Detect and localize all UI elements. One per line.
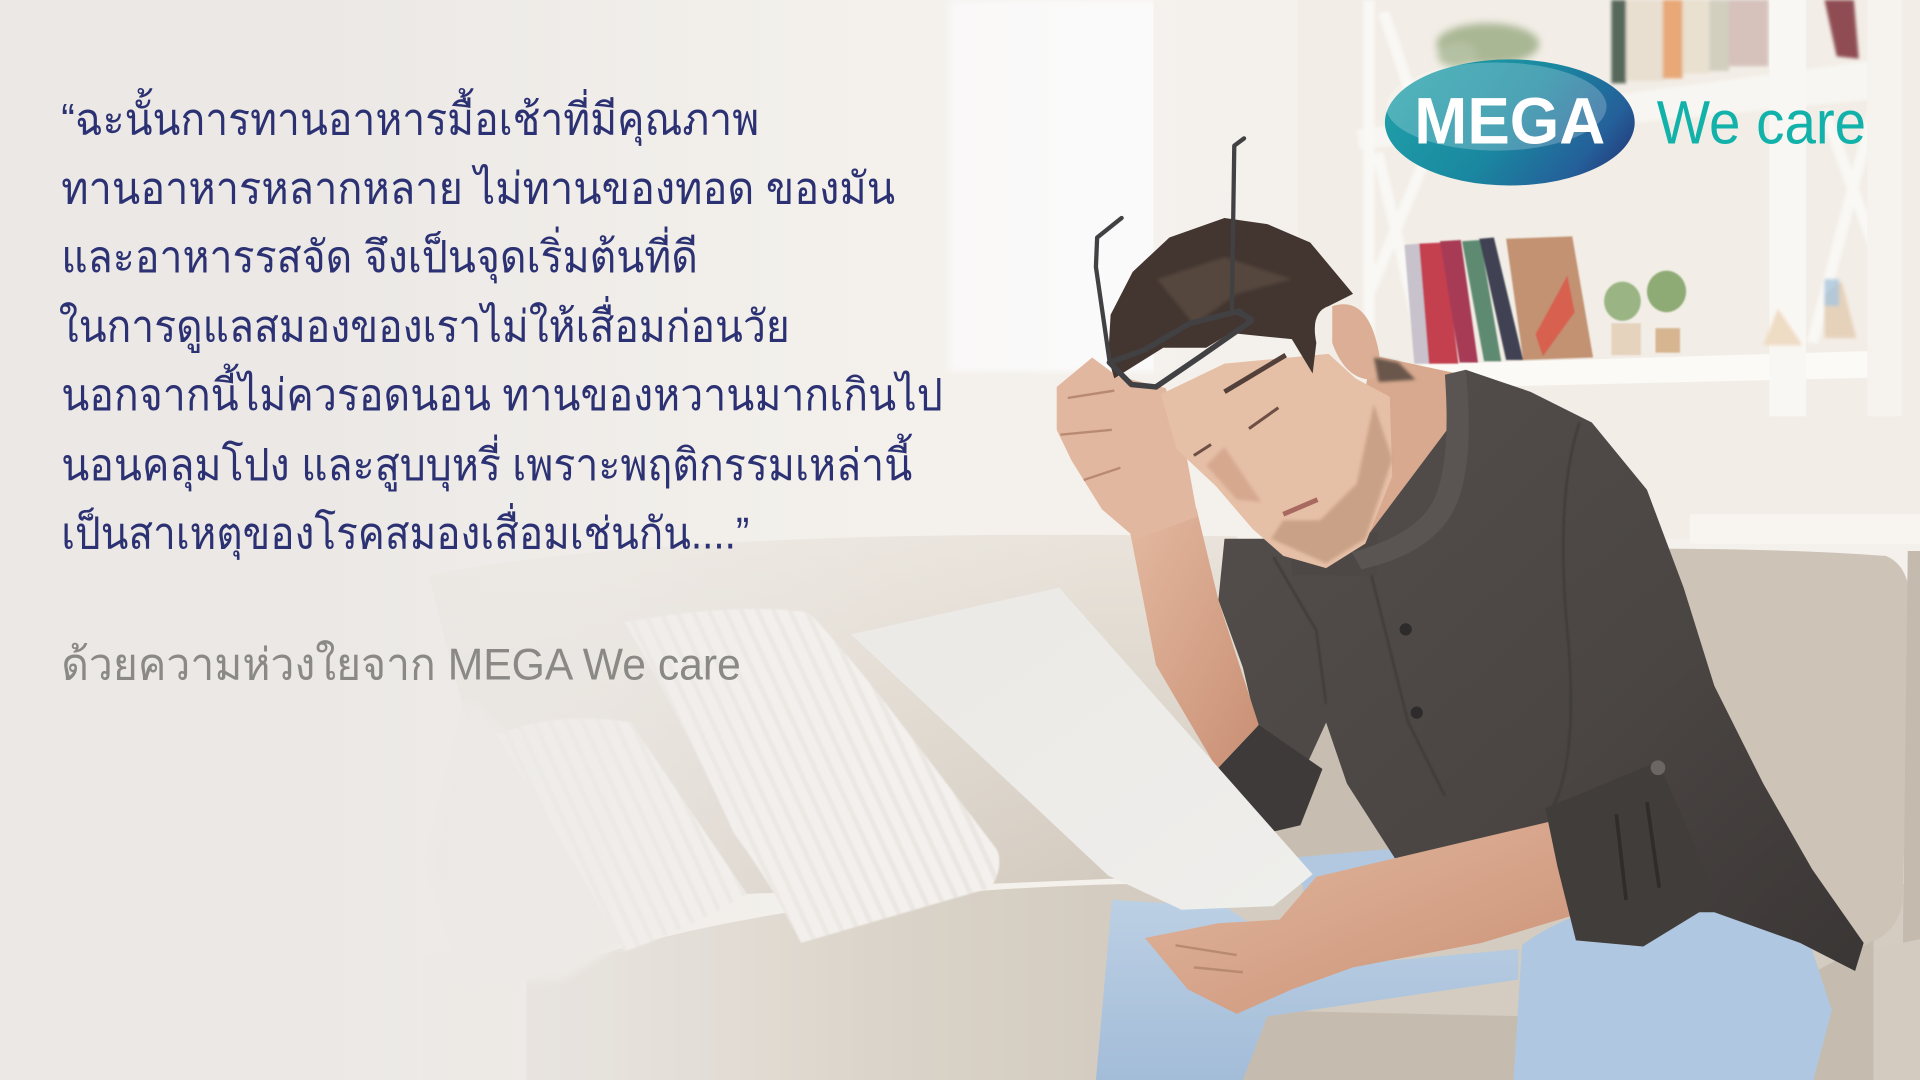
shirt collar <box>1352 370 1469 569</box>
logo oval <box>1385 59 1635 186</box>
shirt buttons <box>1400 623 1423 719</box>
hand on forehead <box>1057 358 1198 539</box>
ornament on shelf <box>1763 279 1856 345</box>
lower shelf board <box>1406 350 1896 389</box>
upper shelf board <box>1357 59 1886 149</box>
overlay: left fade <box>0 0 1102 1080</box>
quote text: นอกจากนี้ไม่ควรอดนอน ทานของหวานมากเกินไป <box>61 363 943 420</box>
quote text <box>59 88 943 561</box>
quote text: ในการดูแลสมองของเราไม่ให้เสื่อมก่อนวัย <box>59 296 790 354</box>
hair highlight <box>1157 257 1292 324</box>
shirt body <box>1218 370 1864 971</box>
person: man reading paper with glasses <box>851 138 1864 1080</box>
tagline: We care <box>1657 88 1866 156</box>
nose shadow <box>1206 447 1261 502</box>
neck <box>1347 355 1467 566</box>
logo: MEGA We care <box>1385 59 1866 186</box>
books <box>1404 236 1593 364</box>
sofa back left <box>429 535 1396 904</box>
ear <box>1332 304 1380 380</box>
quote text: เป็นสาเหตุของโรคสมองเสื่อมเช่นกัน....” <box>61 503 749 561</box>
hair nape <box>1374 358 1416 382</box>
quote text: “ฉะนั้นการทานอาหารมื้อเช้าที่มีคุณภาพ <box>61 88 759 147</box>
signature line: ด้วยความห่วงใยจาก MEGA We care <box>61 640 741 690</box>
beard shadow <box>1271 404 1392 563</box>
logo wordmark: MEGA <box>1414 84 1605 158</box>
shirt folds and seams <box>1273 422 1580 814</box>
face <box>1161 354 1392 568</box>
quote text: นอนคลุมโปง และสูบบุหรี่ เพราะพฤติกรรมเหล่านี้ <box>61 433 913 492</box>
pillows <box>429 609 999 986</box>
sofa seat base <box>527 884 1920 1080</box>
small potted plants <box>1604 271 1686 355</box>
left cuff <box>1217 725 1322 833</box>
right back cushion <box>1633 549 1910 945</box>
eye and mouth <box>1194 355 1318 514</box>
upper shelf books <box>1611 0 1859 83</box>
sofa <box>422 535 1920 1080</box>
raised forearm <box>1129 508 1259 769</box>
glasses <box>1096 138 1251 387</box>
upper shelf plant <box>1436 23 1539 67</box>
rolled sleeve <box>1545 762 1719 947</box>
quote text: และอาหารรสจัด จึงเป็นจุดเริ่มต้นที่ดี <box>61 226 698 284</box>
hair <box>1108 218 1353 378</box>
jeans <box>1096 847 1832 1080</box>
lower forearm and hand <box>1145 820 1604 1014</box>
bookshelf with books and plants <box>1357 0 1902 416</box>
shirt under chin <box>1292 533 1378 576</box>
paper <box>851 588 1313 910</box>
lower left base <box>422 953 527 1080</box>
sofa back behind torso <box>1273 686 1408 894</box>
quote text: ทานอาหารหลากหลาย ไม่ทานของทอด ของมัน <box>61 163 895 213</box>
shelf crossbars <box>1369 0 1873 367</box>
front seat cushions <box>1243 1010 1531 1080</box>
